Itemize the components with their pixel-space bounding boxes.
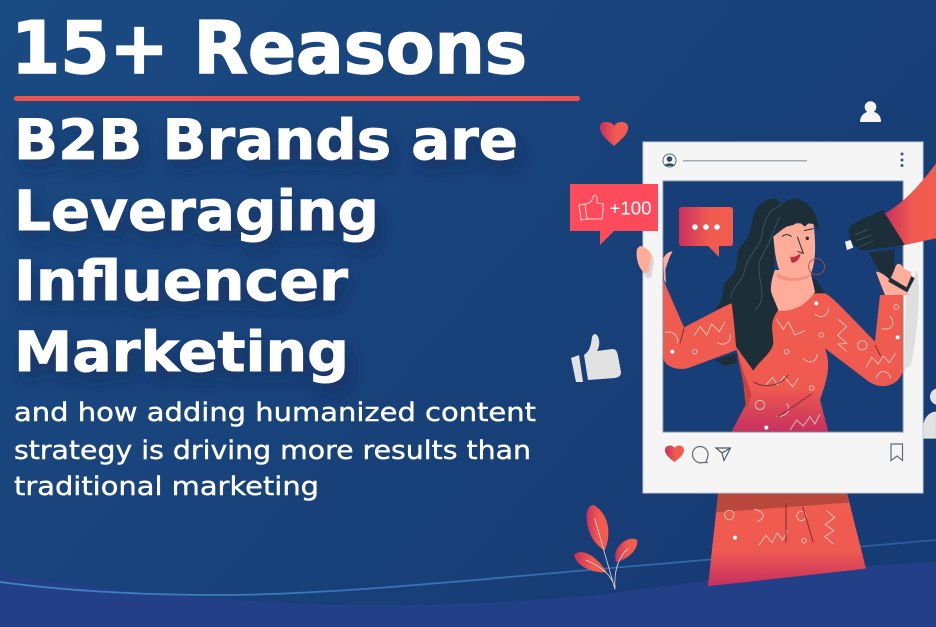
post header: avatar, name line, menu dots	[663, 152, 904, 167]
icon: thumbs up grey	[571, 334, 621, 382]
title: B2B Brands are Leveraging Influencer Marketing	[14, 108, 518, 384]
post action icons	[665, 444, 902, 463]
subtitle: strategy is driving more results than	[14, 436, 531, 466]
woman illustration	[663, 198, 909, 432]
icon: floating heart	[600, 122, 628, 146]
title: B2B Brands are Leveraging Influencer Marketing: Leveraging	[14, 179, 379, 243]
subtitle	[14, 398, 536, 502]
plant	[574, 505, 637, 589]
speech bubble	[679, 207, 733, 257]
title: B2B Brands are Leveraging Influencer Marketing: Influencer	[14, 249, 348, 313]
title: B2B Brands are Leveraging Influencer Marketing: B2B Brands are	[14, 108, 518, 172]
megaphone and right hand	[845, 163, 936, 295]
icon: send	[716, 448, 730, 460]
subtitle: and how adding humanized content	[14, 398, 536, 428]
left hand on frame	[637, 246, 654, 278]
bottom wave	[0, 540, 936, 627]
icon: user top right	[860, 101, 881, 122]
arm shadow on frame	[904, 270, 919, 370]
heading underline	[14, 96, 580, 101]
icon: user right edge	[923, 388, 936, 439]
icon: like heart	[665, 446, 684, 462]
subtitle: traditional marketing	[14, 472, 319, 502]
icon: comment	[692, 446, 708, 463]
post frame	[643, 142, 923, 493]
like badge +100: +100	[610, 198, 652, 218]
title: B2B Brands are Leveraging Influencer Marketing: Marketing	[14, 320, 349, 384]
icon: bookmark	[891, 444, 902, 460]
heading: 15+ Reasons: 15+ Reasons	[11, 6, 527, 90]
dress skirt below frame	[708, 492, 866, 586]
like badge +100	[570, 184, 658, 245]
